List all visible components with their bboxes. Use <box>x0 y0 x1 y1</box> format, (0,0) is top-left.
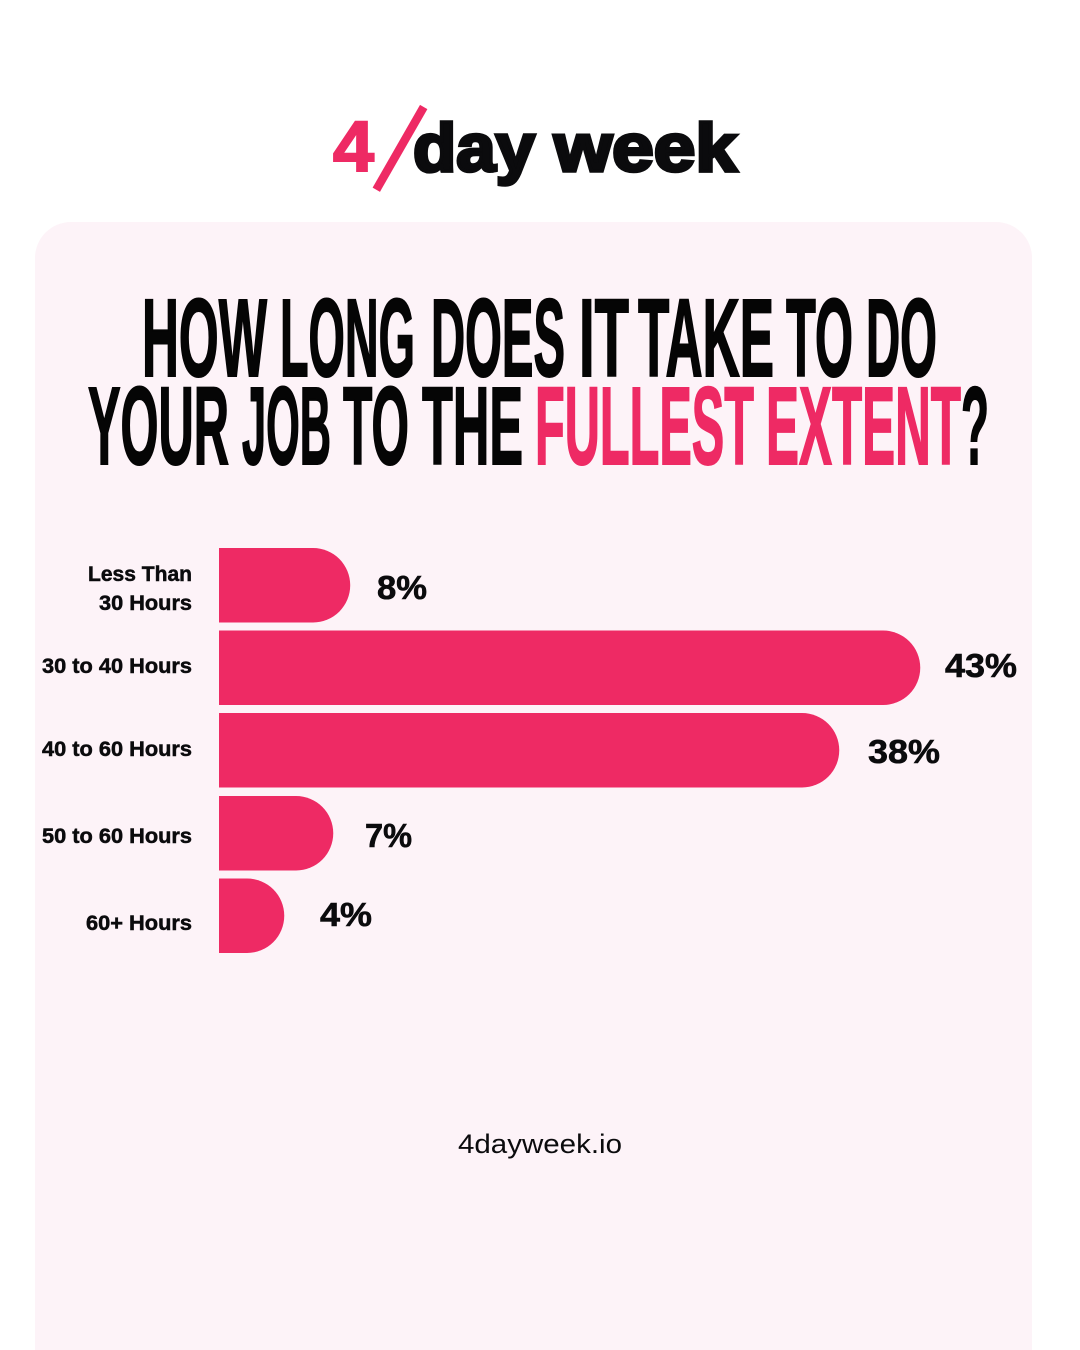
logo: 4/day week: week <box>553 110 737 186</box>
title <box>88 277 989 488</box>
logo: 4/day week: day <box>413 110 535 186</box>
row: less than 30 hours, 8%: 8% <box>377 569 427 606</box>
row: 50 to 60 hours, 7% <box>42 796 412 870</box>
logo: 4/day week <box>333 107 737 190</box>
title: HOW <box>142 277 267 400</box>
panel: pink background card <box>35 222 1032 1350</box>
row: 40 to 60 hours, 38%: 40 to 60 Hours <box>42 738 192 761</box>
title: IT <box>579 277 629 400</box>
row: 30 to 40 hours, 43%: 30 to 40 Hours <box>42 655 192 678</box>
logo: 4/day week: 4 <box>333 108 375 187</box>
title: DOES <box>431 277 565 400</box>
row: 30 to 40 hours, 43% <box>42 630 1017 705</box>
row: less than 30 hours, 8%: Less Than <box>88 563 192 586</box>
row: 40 to 60 hours, 38% <box>42 713 940 788</box>
title: FULLEST <box>535 365 754 488</box>
title: JOB <box>242 365 331 488</box>
row: 60+ hours, 4%: 60+ Hours <box>86 912 192 935</box>
title: TAKE <box>638 277 774 400</box>
bar chart <box>42 548 1017 953</box>
row: 50 to 60 hours, 7%: 7% <box>365 817 412 854</box>
row: less than 30 hours, 8% <box>88 548 427 622</box>
row: 30 to 40 hours, 43%: 43% <box>945 647 1017 684</box>
row: less than 30 hours, 8%: 30 Hours <box>99 592 192 615</box>
title: THE <box>422 365 523 488</box>
row: 50 to 60 hours, 7%: 50 to 60 Hours <box>42 825 192 848</box>
title: LONG <box>280 277 415 400</box>
text: ? <box>961 365 989 488</box>
title: TO <box>786 277 853 400</box>
footer: website: 4dayweek.io <box>458 1129 622 1159</box>
row: 40 to 60 hours, 38%: 38% <box>868 733 940 770</box>
title: DO <box>866 277 937 400</box>
row: 60+ hours, 4% <box>86 878 372 953</box>
title: YOUR <box>88 365 229 488</box>
row: 60+ hours, 4%: 4% <box>320 896 372 933</box>
title: TO <box>343 365 409 488</box>
